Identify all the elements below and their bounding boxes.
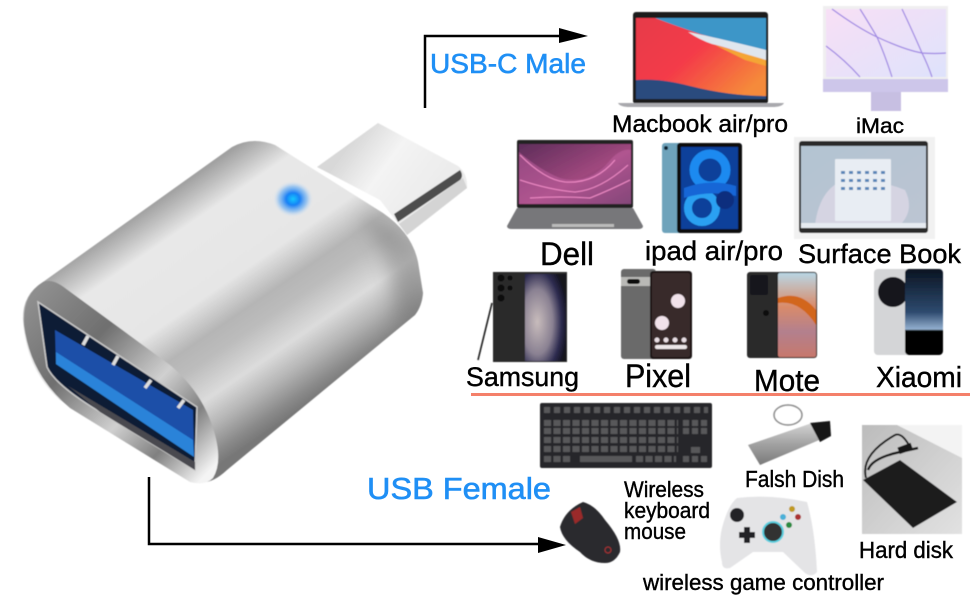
blue LED indicator: [273, 181, 313, 217]
port pins: [83, 336, 184, 408]
device: game controller: [720, 497, 817, 575]
label: iMac: iMac: [856, 115, 904, 138]
label: ipad air/pro: ipad air/pro: [645, 236, 783, 266]
device: flash drive: [748, 405, 831, 465]
label: Falsh Dish: Falsh Dish: [745, 466, 844, 492]
device: Moto phone: [747, 272, 817, 358]
label: Samsung: Samsung: [466, 362, 579, 392]
label: Macbook air/pro: Macbook air/pro: [612, 111, 788, 138]
icon: USB-C to USB-A adapter: [23, 123, 467, 483]
body shoulder shading: [363, 214, 423, 321]
arrow: USB-C male to devices: [425, 28, 588, 108]
lower inner wall: [68, 386, 195, 470]
divider line: [471, 393, 970, 396]
label: Mote: Mote: [754, 363, 820, 398]
arrow: USB female to accessories: [149, 477, 566, 553]
front rim: [24, 281, 218, 483]
blue port tongue: [55, 330, 194, 455]
label: Wireless keyboard mouse: Wireless: [624, 477, 704, 502]
device: Samsung phone: [478, 272, 567, 362]
plug seam: [394, 170, 462, 222]
label: Wireless keyboard mouse: mouse: [624, 519, 686, 544]
device: mouse: [560, 502, 620, 563]
label: wireless game controller: wireless game controller: [642, 570, 884, 595]
label: Xiaomi: Xiaomi: [876, 362, 962, 394]
device: iMac: [823, 6, 948, 111]
label: Wireless keyboard mouse: keyboard: [624, 498, 710, 523]
device: Macbook: [618, 12, 784, 107]
device: Dell laptop: [507, 140, 643, 229]
heading: USB-C Male: USB-C Male: [430, 48, 586, 79]
label: Surface Book: Surface Book: [798, 239, 962, 269]
device: hard disk: [862, 425, 962, 534]
heading: USB Female: USB Female: [367, 471, 551, 506]
device: Surface Book: [794, 137, 935, 239]
device: Pixel phone: [621, 269, 692, 359]
label: Pixel: Pixel: [625, 358, 691, 394]
label: Wireless keyboard mouse: [624, 477, 710, 544]
device: keyboard: [540, 403, 712, 468]
label: Hard disk: Hard disk: [859, 537, 953, 563]
device: Xiaomi phone: [874, 269, 943, 355]
adapter body: [23, 141, 423, 482]
label: Dell: Dell: [540, 236, 594, 272]
USB port opening: [38, 302, 197, 470]
device: iPad: [662, 143, 742, 233]
USB-C plug: [317, 123, 467, 235]
